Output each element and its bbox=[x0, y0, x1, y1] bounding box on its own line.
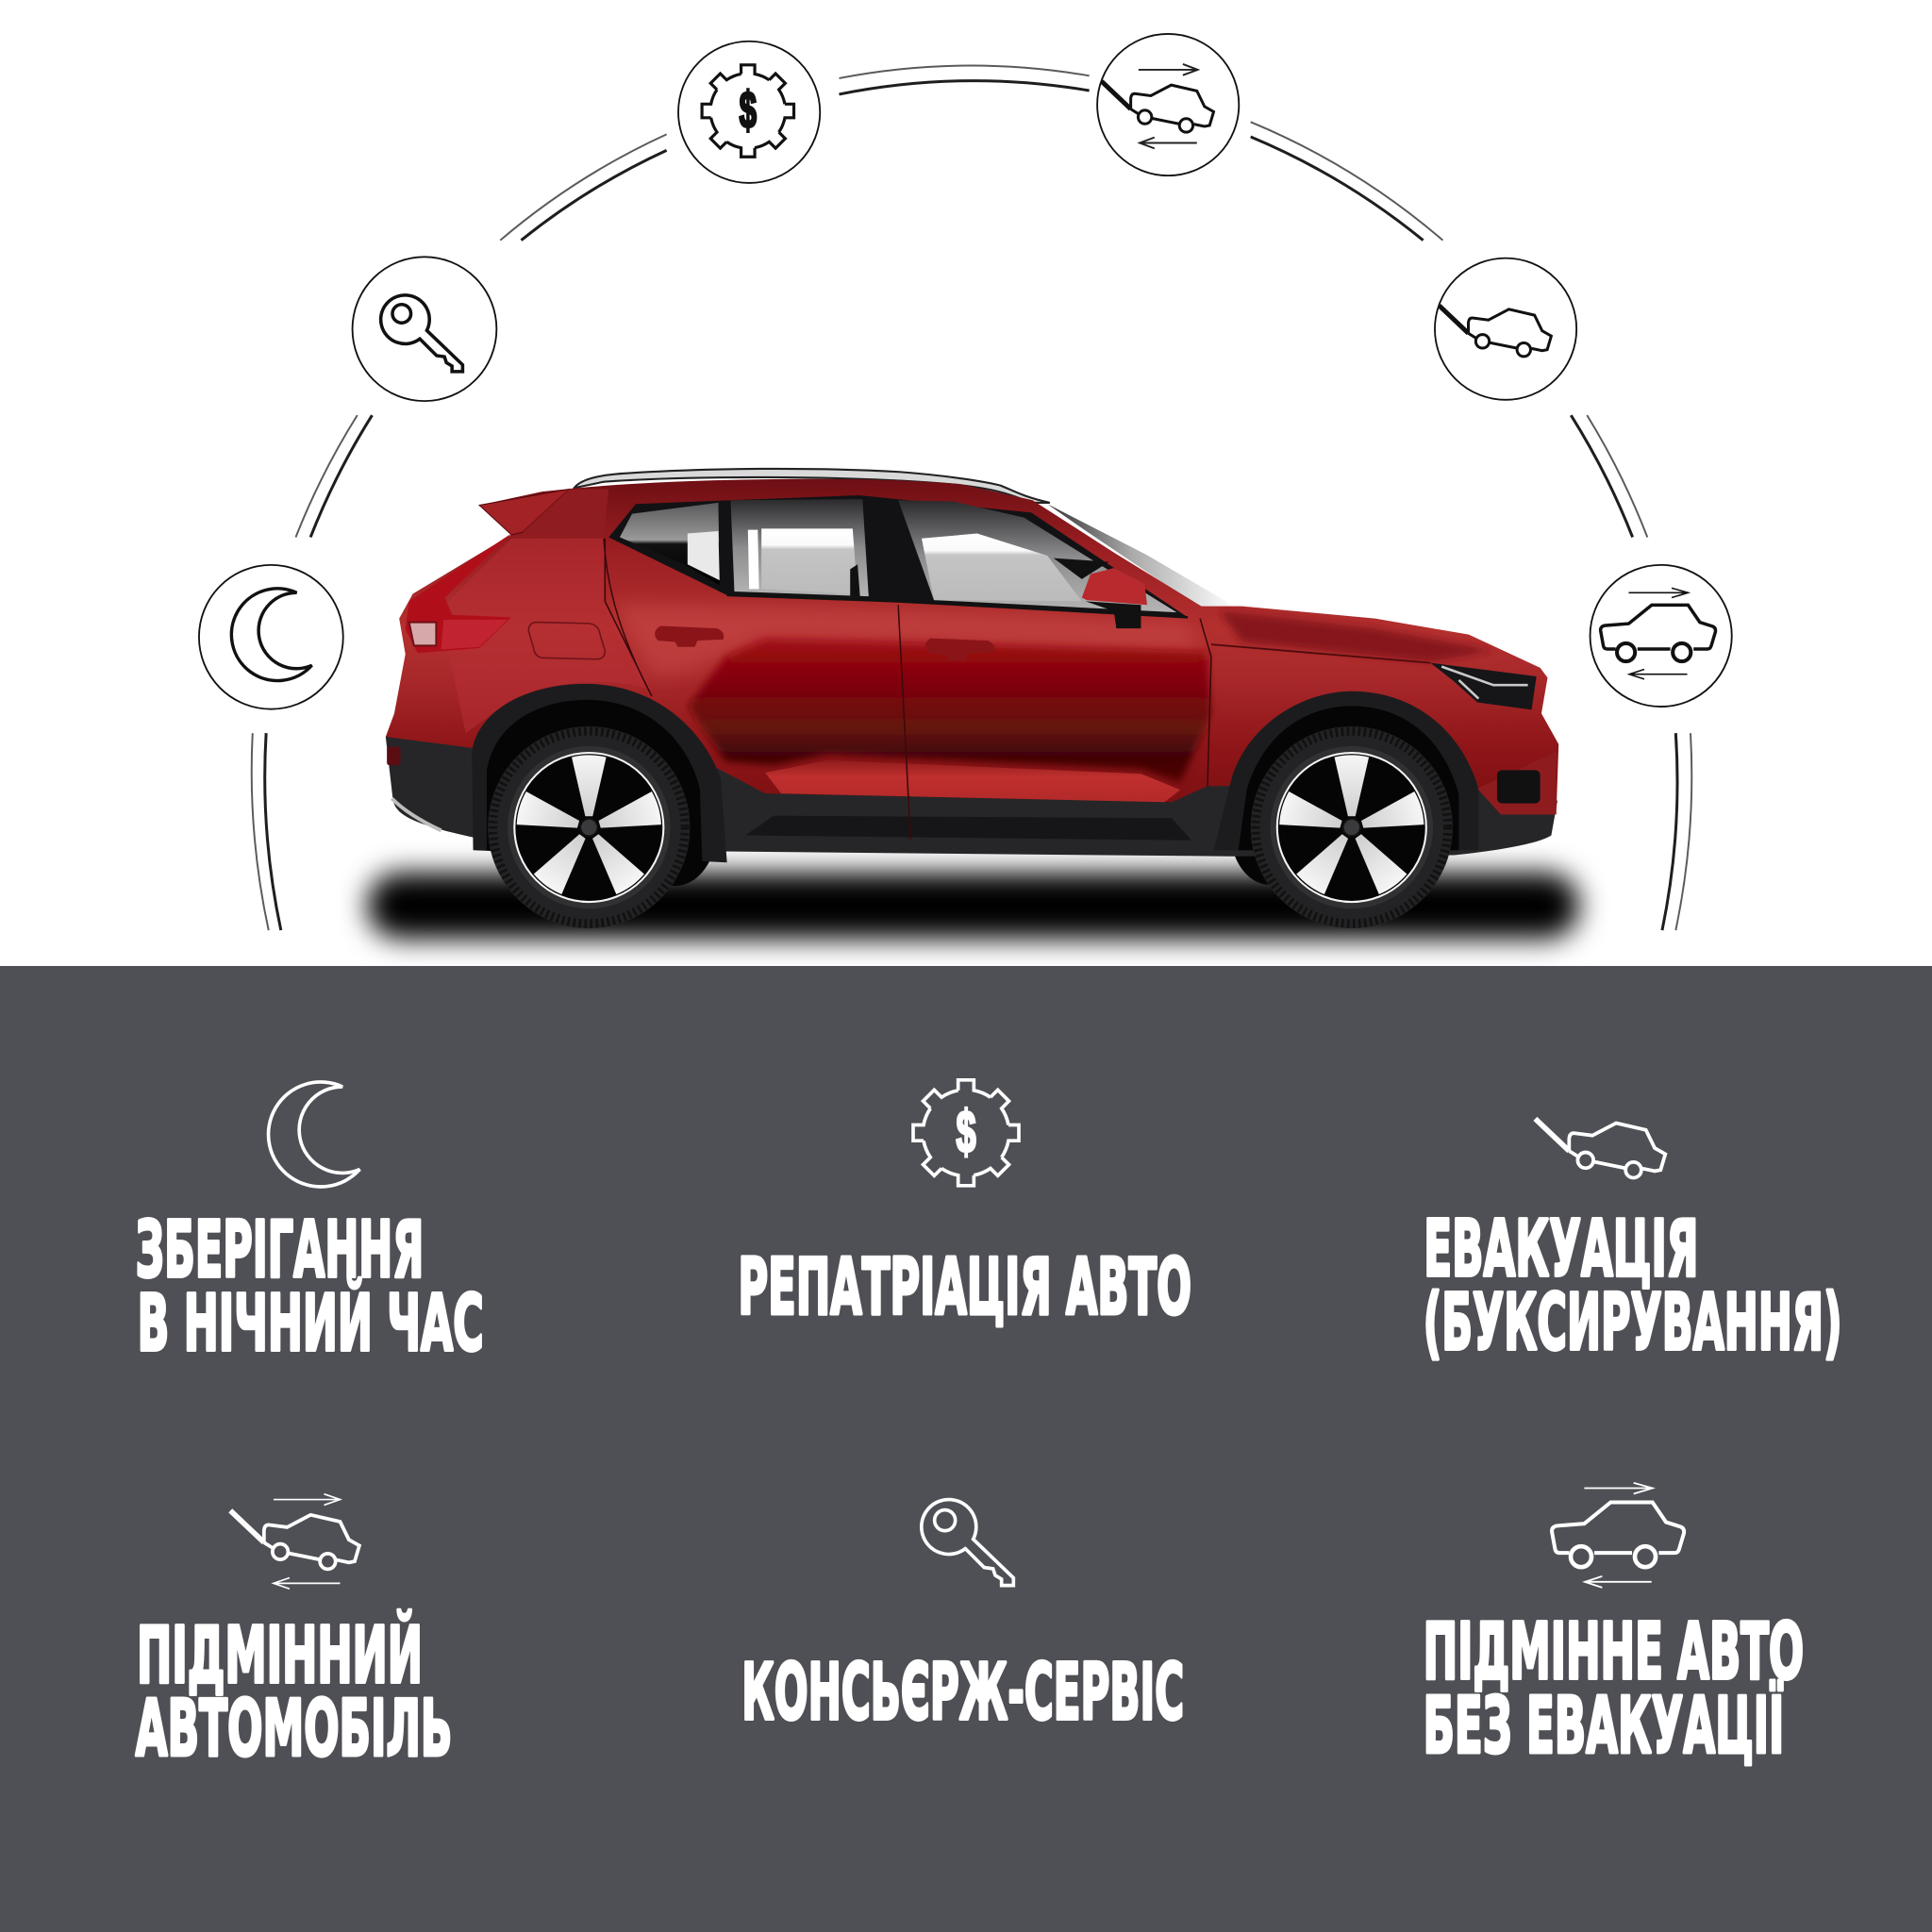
fuel door bbox=[528, 623, 605, 659]
icon: tow car with arrows bbox=[230, 1494, 359, 1589]
icon: car with arrows bbox=[1552, 1483, 1684, 1588]
exhaust trim bbox=[391, 798, 441, 830]
service: night storage bbox=[136, 1082, 484, 1369]
heading: replacement without towing bbox=[1424, 1607, 1804, 1771]
hood crease bbox=[1220, 611, 1493, 661]
icon circle: moon bbox=[199, 565, 343, 709]
door highlight bbox=[616, 604, 1201, 677]
service: repatriation bbox=[738, 1078, 1191, 1332]
icon: gear with dollar bbox=[911, 1078, 1021, 1188]
mirror bbox=[1082, 568, 1147, 605]
icon circle: key bbox=[353, 257, 496, 401]
icon: moon bbox=[269, 1082, 359, 1187]
front wheel bbox=[1251, 726, 1453, 928]
window sill shadow bbox=[727, 595, 1188, 617]
windshield glass bbox=[1047, 504, 1235, 608]
rear shoulder light reflection bbox=[446, 539, 652, 733]
icon: key bbox=[922, 1500, 1013, 1586]
door handles bbox=[655, 626, 724, 647]
heading: night storage: В НІЧНИЙ ЧАС bbox=[138, 1278, 484, 1369]
icon: tow truck car bbox=[1535, 1119, 1665, 1178]
roof rail bbox=[575, 469, 1050, 503]
heading: replacement car: ПІДМІННИЙ bbox=[137, 1610, 423, 1701]
door seams bbox=[604, 539, 1211, 839]
red SUV side view bbox=[386, 469, 1558, 928]
icon circle: tow with arrows bbox=[1097, 34, 1239, 175]
dark lower panel bbox=[0, 966, 1932, 1932]
heading: towing bbox=[1424, 1205, 1842, 1368]
service: towing bbox=[1424, 1119, 1842, 1368]
service: replacement car without towing bbox=[1424, 1483, 1804, 1771]
rear wheel bbox=[488, 726, 690, 928]
icon circle: gear with dollar: $ bbox=[740, 81, 757, 140]
icon circle: tow bbox=[1435, 258, 1576, 400]
wheel arches bbox=[472, 684, 727, 862]
icon circle: car with arrows bbox=[1591, 565, 1732, 707]
heading: night storage bbox=[136, 1206, 484, 1369]
front door glass bbox=[898, 500, 1176, 612]
icon: gear with dollar: $ bbox=[956, 1100, 976, 1166]
tail lamp bbox=[406, 534, 511, 653]
heading: replacement car: АВТОМОБІЛЬ bbox=[136, 1685, 452, 1774]
bright sill band bbox=[765, 760, 1180, 802]
icon circle: gear with dollar bbox=[678, 42, 820, 183]
front vent bbox=[1497, 770, 1541, 804]
red body shell bbox=[386, 479, 1558, 814]
inner tyres bbox=[633, 770, 1308, 886]
rear reflector bbox=[387, 747, 400, 765]
heading: night storage: ЗБЕРІГАННЯ bbox=[136, 1206, 424, 1295]
heading: concierge: КОНСЬЄРЖ-СЕРВІС bbox=[741, 1648, 1184, 1738]
heading: repatriation: РЕПАТРІАЦІЯ АВТО bbox=[738, 1242, 1191, 1332]
dark door sculpt bbox=[688, 640, 1211, 782]
service: concierge bbox=[741, 1500, 1184, 1738]
arc ring segments around the car bbox=[252, 66, 1691, 930]
service: replacement car bbox=[136, 1494, 452, 1774]
car ground shadow bbox=[367, 873, 1579, 939]
heading: replacement car bbox=[136, 1610, 452, 1774]
rear door glass bbox=[731, 499, 869, 596]
lower black cladding bbox=[386, 727, 1557, 857]
spoiler bbox=[479, 490, 569, 535]
heading: towing: ЕВАКУАЦІЯ bbox=[1424, 1205, 1698, 1294]
front bumper red lower bbox=[1477, 752, 1557, 814]
rear quarter glass bbox=[620, 503, 720, 585]
rear pillar bbox=[523, 490, 608, 537]
headlight bbox=[1430, 663, 1537, 709]
window frame bbox=[608, 495, 1188, 617]
rocker inset bbox=[745, 816, 1191, 841]
